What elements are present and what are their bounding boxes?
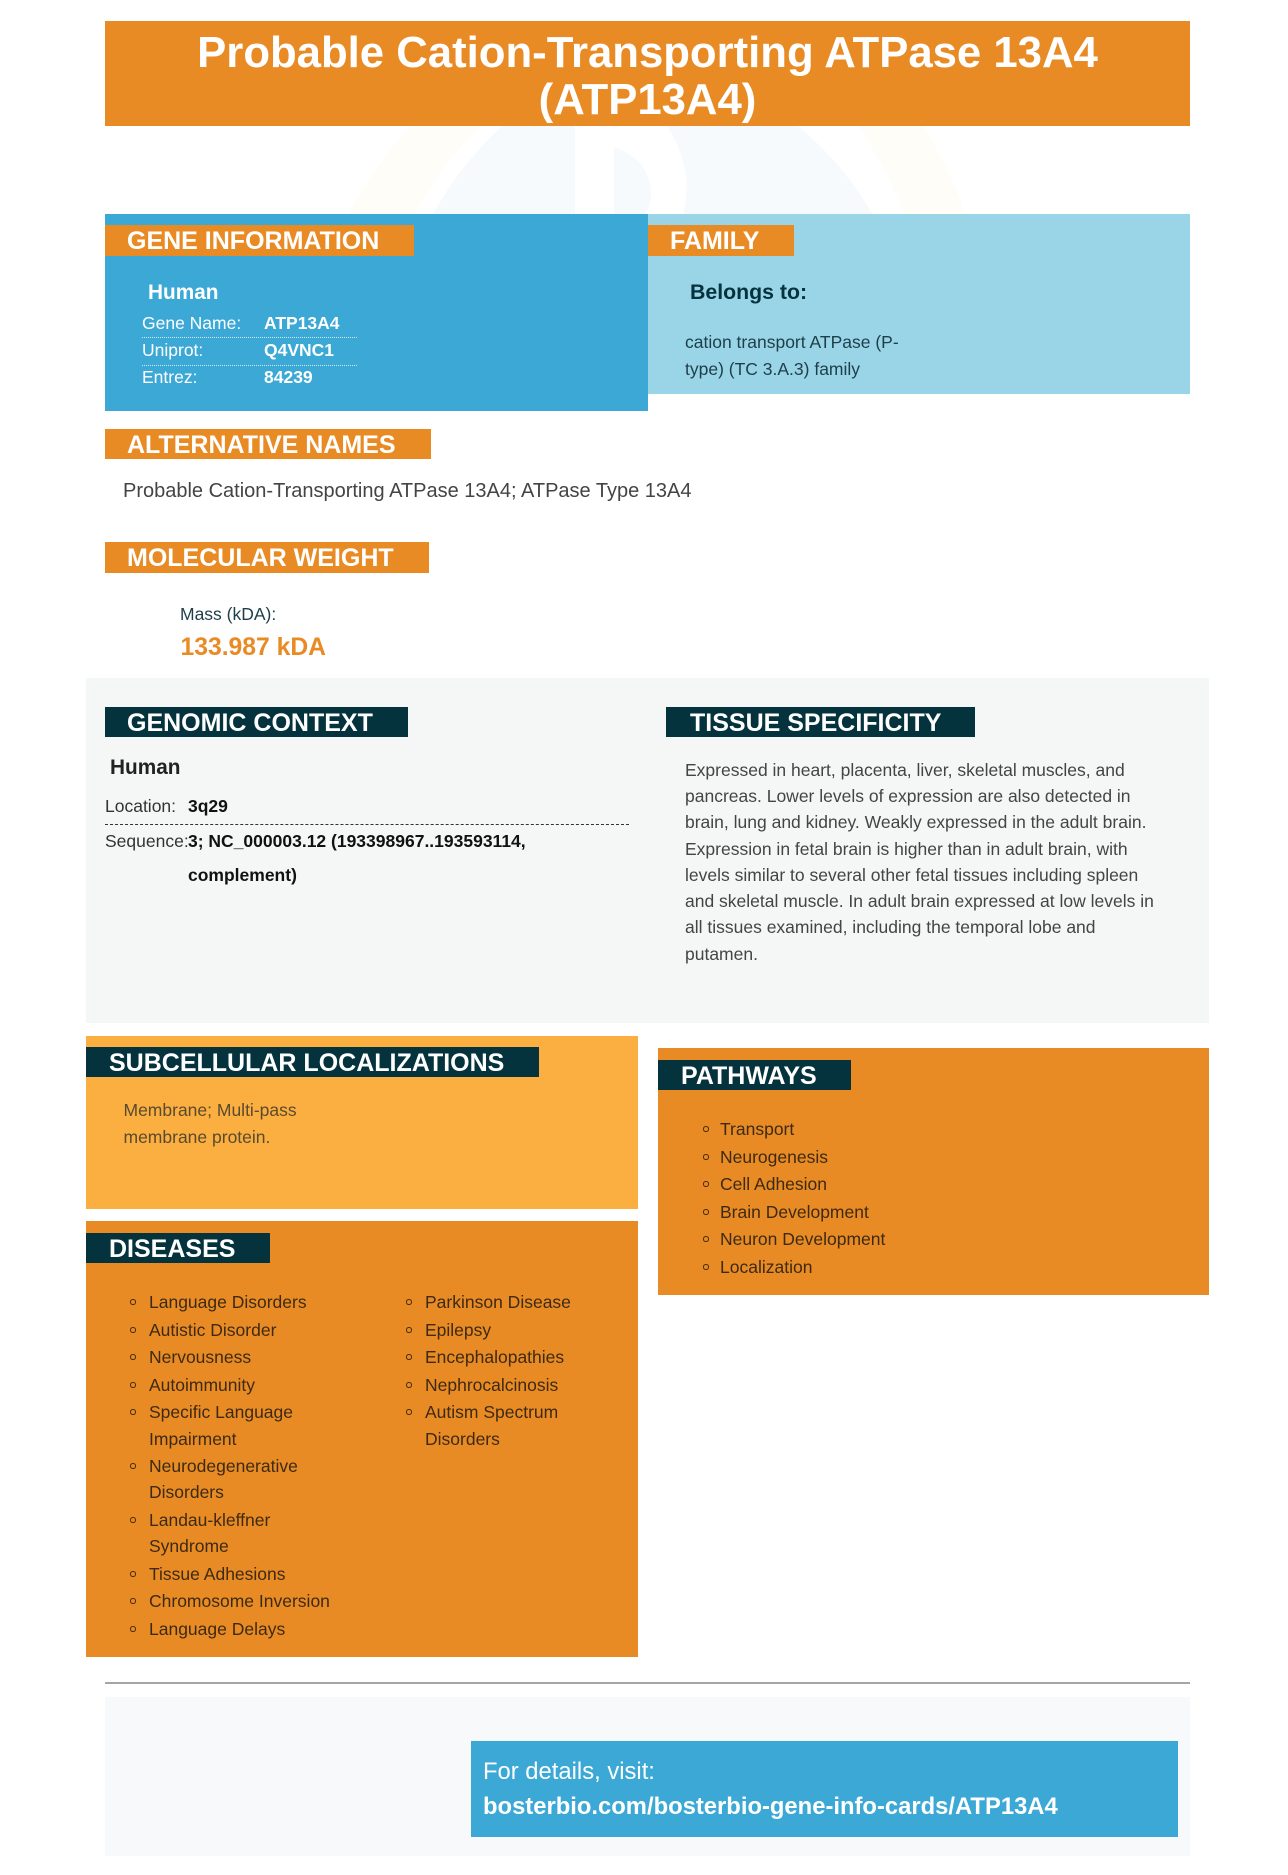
heading: diseases [86, 1233, 270, 1263]
heading: subcellular localizations: SUBCELLULAR LOCALIZATIONS [109, 1049, 504, 1077]
family description: type) (TC 3.A.3) family [685, 359, 860, 379]
sequence row: complement) [188, 865, 297, 885]
species label: Human [110, 756, 180, 779]
row: gene name [142, 310, 357, 338]
tissue specificity text: all tissues examined, including the temporal lobe and [685, 917, 1096, 937]
list: diseases column 2: Epilepsy [425, 1320, 491, 1340]
sequence row: 3; NC_000003.12 (193398967..193593114, [188, 831, 526, 851]
row: entrez: Entrez: [142, 367, 197, 387]
title banner: (ATP13A4) [539, 75, 756, 124]
tissue specificity text: brain, lung and kidney. Weakly expressed in the adult brain. [685, 812, 1146, 832]
list: diseases column 2: Parkinson Disease [425, 1292, 571, 1312]
row: uniprot [142, 338, 357, 366]
list: diseases column 2: Disorders [425, 1429, 500, 1449]
heading: tissue specificity: TISSUE SPECIFICITY [690, 709, 941, 737]
heading: genomic context: GENOMIC CONTEXT [127, 709, 373, 737]
subcellular text: Membrane; Multi-pass [124, 1100, 297, 1120]
location row: Location: [105, 796, 176, 816]
list: diseases column 1: Landau-kleffner [149, 1510, 270, 1530]
list: pathways: Localization [720, 1257, 812, 1277]
sequence row: Sequence: [105, 831, 189, 851]
list: pathways [703, 1119, 886, 1277]
heading: gene information: GENE INFORMATION [127, 226, 379, 254]
list: pathways: Cell Adhesion [720, 1174, 827, 1194]
list: diseases column 1: Disorders [149, 1482, 224, 1502]
list: diseases column 1: Autoimmunity [149, 1375, 255, 1395]
row: entrez [142, 367, 313, 387]
panel: family [648, 214, 1190, 394]
list: diseases column 2 [406, 1292, 571, 1449]
tissue specificity text: levels similar to several other fetal tissues including spleen [685, 865, 1138, 885]
panel: footer [105, 1697, 1190, 1856]
row: gene name: Gene Name: [142, 313, 241, 333]
tissue specificity text: pancreas. Lower levels of expression are also detected in [685, 786, 1131, 806]
list: diseases column 2: Nephrocalcinosis [425, 1375, 558, 1395]
species label: Human [148, 281, 218, 304]
list: diseases column 1: Language Delays [149, 1619, 285, 1639]
panel: gene information [105, 214, 648, 411]
callout: details link: For details, visit: [483, 1758, 655, 1785]
callout: details link [471, 1741, 1178, 1837]
row: uniprot: Q4VNC1 [264, 340, 334, 360]
row: entrez: 84239 [264, 367, 313, 387]
list: diseases column 1: Language Disorders [149, 1292, 307, 1312]
panel: pathways [658, 1048, 1209, 1295]
subcellular text: membrane protein. [124, 1127, 270, 1147]
tissue specificity text: Expressed in heart, placenta, liver, skeletal muscles, and [685, 760, 1125, 780]
callout: details link: bosterbio.com/bosterbio-gene-info-cards/ATP13A4 [483, 1793, 1058, 1820]
tissue specificity text: putamen. [685, 944, 758, 964]
title banner [105, 21, 1190, 126]
heading: pathways [658, 1060, 851, 1090]
list: diseases column 1: Impairment [149, 1429, 237, 1449]
list: pathways: Neuron Development [720, 1229, 885, 1249]
heading: diseases: DISEASES [109, 1235, 235, 1263]
mass label: Mass (kDA): [180, 604, 276, 624]
heading: alternative names: ALTERNATIVE NAMES [127, 431, 396, 459]
heading: pathways: PATHWAYS [681, 1062, 817, 1090]
list: diseases column 1: Neurodegenerative [149, 1456, 298, 1476]
row: gene name: ATP13A4 [264, 313, 340, 333]
panel: genomic context and tissue specificity [86, 678, 1209, 1023]
heading: molecular weight: MOLECULAR WEIGHT [127, 544, 394, 572]
list: diseases column 1: Specific Language [149, 1402, 293, 1422]
location row [105, 793, 629, 825]
list: pathways: Brain Development [720, 1202, 869, 1222]
list: diseases column 2: Encephalopathies [425, 1347, 564, 1367]
list: diseases column 1: Autistic Disorder [149, 1320, 276, 1340]
list: pathways: Neurogenesis [720, 1147, 828, 1167]
row: uniprot: Uniprot: [142, 340, 203, 360]
list: diseases column 1: Tissue Adhesions [149, 1564, 286, 1584]
list: diseases column 2: Autism Spectrum [425, 1402, 558, 1422]
heading: family: FAMILY [670, 226, 759, 254]
alternative names text: Probable Cation-Transporting ATPase 13A4; ATPase Type 13A4 [123, 480, 692, 502]
list: diseases column 1: Nervousness [149, 1347, 251, 1367]
subcellular text [124, 1100, 297, 1147]
sequence row [105, 831, 526, 885]
tissue specificity text: and skeletal muscle. In adult brain expressed at low levels in [685, 891, 1154, 911]
heading: family [648, 224, 794, 256]
list: pathways: Transport [720, 1119, 794, 1139]
belongs to label: Belongs to: [690, 280, 807, 304]
panel: diseases [86, 1221, 638, 1657]
tissue specificity text: Expression in fetal brain is higher than in adult brain, with [685, 839, 1128, 859]
list: diseases column 1 [130, 1292, 330, 1639]
location row: 3q29 [188, 796, 228, 816]
panel: subcellular localizations [86, 1036, 638, 1209]
family description: cation transport ATPase (P- [685, 332, 899, 352]
list: diseases column 1: Syndrome [149, 1536, 229, 1556]
tissue specificity text [685, 760, 1154, 964]
family description [685, 332, 899, 379]
list: diseases column 1: Chromosome Inversion [149, 1591, 330, 1611]
title banner: Probable Cation-Transporting ATPase 13A4 [197, 28, 1098, 77]
background watermark logo [434, 126, 872, 214]
mass value: 133.987 kDA [180, 634, 326, 661]
